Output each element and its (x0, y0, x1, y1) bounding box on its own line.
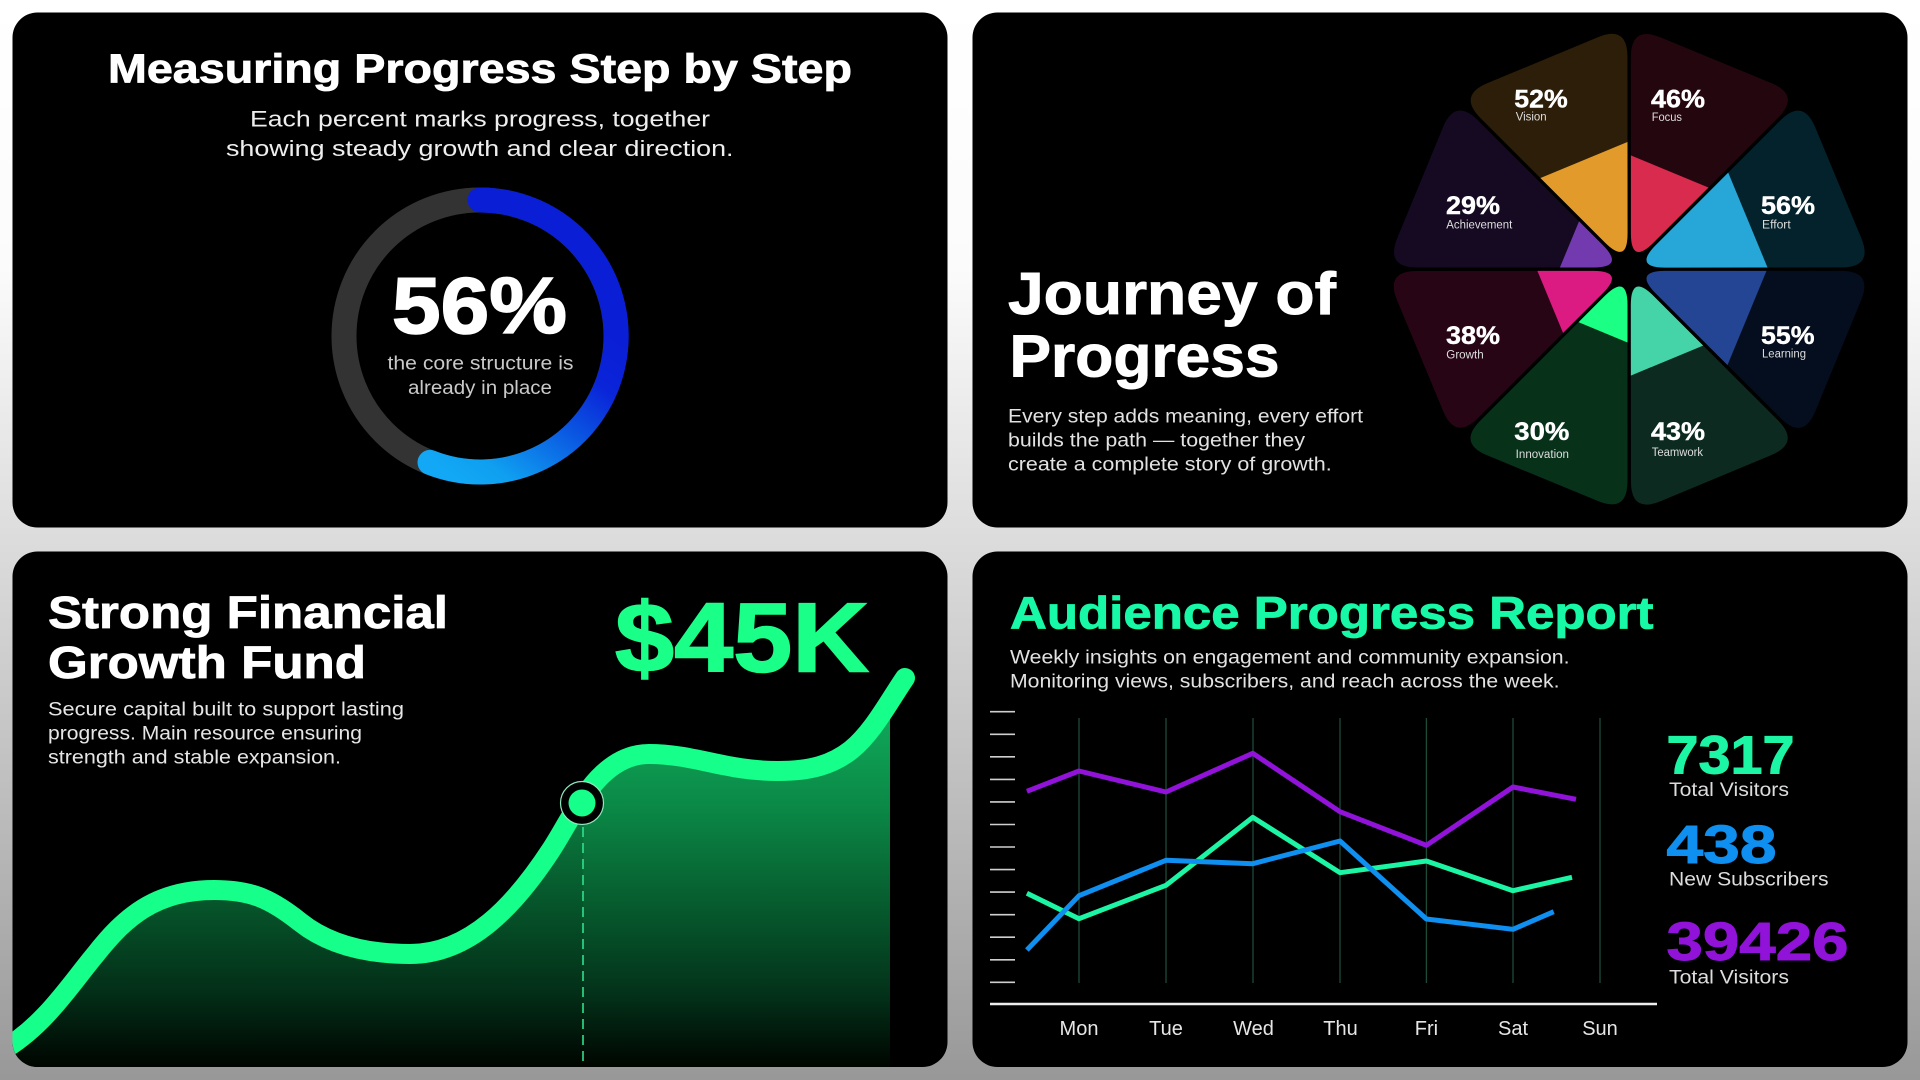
donut caption: already in place (408, 378, 552, 399)
series: green line (1027, 817, 1572, 919)
donut chart: 56 percent (344, 200, 616, 472)
panel: measuring progress (12, 12, 948, 528)
stat: 438 new subscribers (1666, 815, 1828, 891)
title: journey of progress: Journey of (1008, 261, 1336, 327)
x axis labels: Thu (1323, 1018, 1358, 1040)
x axis labels: Mon (1060, 1018, 1098, 1040)
series: purple line (1027, 753, 1576, 845)
stat: 438 new subscribers: New Subscribers (1669, 870, 1828, 891)
segment: achievement 29%: 29% (1446, 192, 1500, 220)
segment: teamwork 43%: 43% (1651, 418, 1705, 446)
x axis labels: Sun (1582, 1018, 1618, 1040)
donut value: 56% (392, 261, 567, 350)
title: financial growth fund (48, 587, 448, 688)
x axis labels: Wed (1233, 1018, 1274, 1040)
segment: vision 52%: 52% (1514, 85, 1568, 113)
fund body text: progress. Main resource ensuring (48, 724, 362, 745)
series: blue line (1027, 841, 1554, 950)
journey body text: create a complete story of growth. (1008, 455, 1332, 476)
donut caption (388, 353, 574, 399)
segment: growth 38%: 38% (1446, 322, 1500, 350)
segment: teamwork 43%: Teamwork (1652, 447, 1703, 459)
segment: effort 56%: 56% (1761, 192, 1815, 220)
panel: journey of progress (972, 0, 1908, 548)
line chart: weekly audience (990, 712, 1657, 1040)
donut caption: the core structure is (388, 353, 574, 374)
title: journey of progress (1008, 261, 1336, 390)
stat: 39426 total visitors: 39426 (1666, 912, 1848, 972)
journey body text (1008, 407, 1364, 476)
fund body text: strength and stable expansion. (48, 748, 341, 769)
subtitle text (226, 107, 734, 161)
segment: growth 38%: Growth (1446, 349, 1484, 361)
subtitle text: showing steady growth and clear direction. (226, 136, 734, 161)
subtitle text: Each percent marks progress, together (250, 107, 710, 132)
stat: 7317 total visitors: Total Visitors (1669, 780, 1789, 801)
stat: 7317 total visitors: 7317 (1666, 725, 1794, 785)
segment: achievement 29%: Achievement (1446, 220, 1513, 232)
segment: learning 55%: Learning (1762, 349, 1806, 361)
panel: audience progress report (972, 552, 1908, 1067)
title: audience progress report: Audience Progress Report (1010, 587, 1654, 638)
stat: 39426 total visitors (1666, 912, 1848, 988)
segment: innovation 30% (1471, 269, 1629, 504)
segment: vision 52% (1470, 34, 1628, 252)
title: financial growth fund: Growth Fund (48, 637, 366, 688)
title: measuring progress: Measuring Progress Step by Step (108, 46, 852, 92)
x axis labels: Sat (1498, 1018, 1528, 1040)
fund body text: Secure capital built to support lasting (48, 700, 404, 721)
segment: teamwork 43% (1630, 286, 1788, 505)
title: financial growth fund: Strong Financial (48, 587, 448, 638)
title: journey of progress: Progress (1010, 324, 1280, 390)
x axis labels: Fri (1415, 1018, 1438, 1040)
audience body text (1010, 648, 1570, 693)
panel: financial growth fund (3, 552, 948, 1070)
area chart: fund growth (3, 678, 905, 1070)
journey body text: Every step adds meaning, every effort (1008, 407, 1364, 428)
segment: focus 46%: Focus (1652, 112, 1682, 124)
segment: learning 55% (1629, 269, 1864, 428)
x axis labels (1060, 1018, 1618, 1040)
audience body text: Weekly insights on engagement and community expansion. (1010, 648, 1570, 669)
x axis line (990, 1003, 1657, 1005)
radial chart: eight progress segments (1394, 34, 1865, 505)
stat: 39426 total visitors: Total Visitors (1669, 967, 1789, 988)
segment: effort 56%: Effort (1762, 219, 1792, 231)
big value: $45K: $45K (615, 583, 869, 693)
segment: growth 38% (1394, 270, 1612, 428)
segment: innovation 30%: 30% (1514, 418, 1569, 446)
segment: focus 46%: 46% (1651, 85, 1705, 113)
fund body text (48, 700, 404, 769)
segment: learning 55%: 55% (1761, 322, 1814, 350)
marker dot (560, 782, 604, 824)
stat: 438 new subscribers: 438 (1666, 815, 1776, 875)
segment: effort 56% (1646, 110, 1865, 268)
x axis labels: Tue (1149, 1018, 1183, 1040)
audience body text: Monitoring views, subscribers, and reach across the week. (1010, 672, 1560, 693)
segment: achievement 29% (1394, 111, 1629, 269)
segment: vision 52%: Vision (1516, 112, 1547, 124)
journey body text: builds the path — together they (1008, 431, 1306, 452)
segment: focus 46% (1629, 34, 1788, 269)
segment: innovation 30%: Innovation (1516, 449, 1569, 461)
